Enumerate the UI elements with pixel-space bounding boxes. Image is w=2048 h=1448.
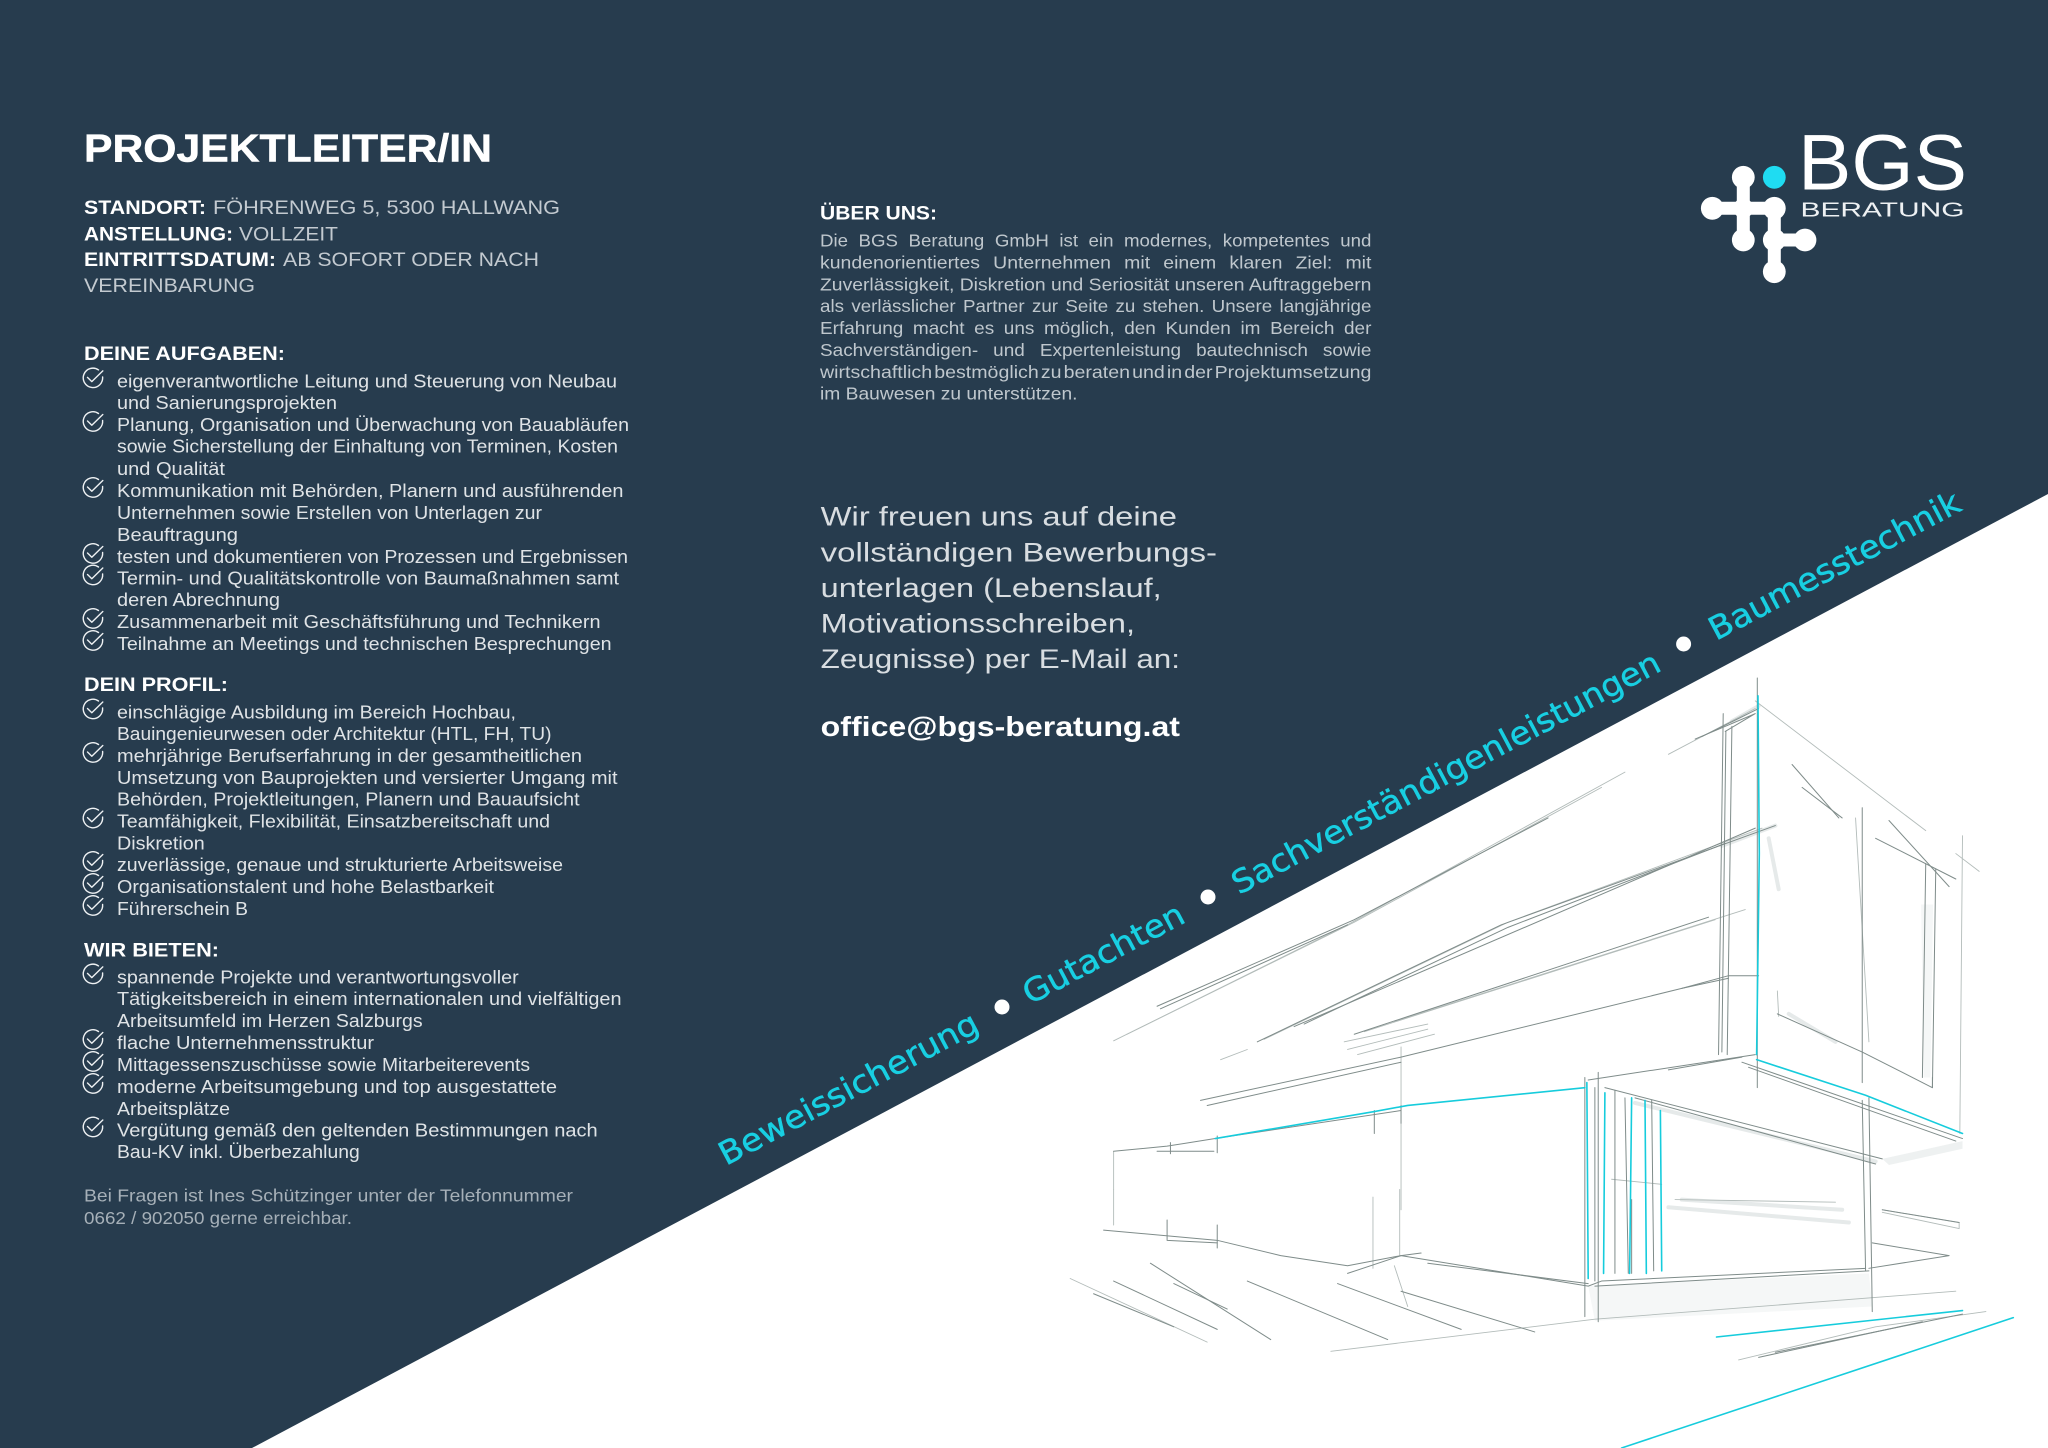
heading: wir bieten: WIR BIETEN: bbox=[84, 940, 219, 962]
list: deine aufgaben: Teilnahme an Meetings und technischen Besprechungen bbox=[117, 634, 612, 654]
job facts block: VOLLZEIT bbox=[239, 223, 338, 245]
list: wir bieten: Arbeitsplätze bbox=[117, 1099, 230, 1119]
job facts block: VEREINBARUNG bbox=[84, 275, 255, 297]
job facts block bbox=[84, 197, 560, 297]
list: deine aufgaben: testen und dokumentieren von Prozessen und Ergebnissen bbox=[117, 547, 628, 567]
bullet bbox=[994, 1000, 1010, 1014]
list: dein profil: Diskretion bbox=[117, 833, 205, 853]
list: deine aufgaben bbox=[83, 368, 629, 654]
heading: über uns: ÜBER UNS: bbox=[820, 201, 937, 224]
tagline: Gutachten: Gutachten bbox=[1016, 895, 1191, 1012]
list: wir bieten bbox=[83, 964, 621, 1162]
list: deine aufgaben: Planung, Organisation und Überwachung von Bauabläufen bbox=[117, 415, 629, 435]
white diagonal panel bbox=[252, 494, 2048, 1448]
list: wir bieten: spannende Projekte und verantwortungsvoller bbox=[117, 967, 519, 987]
diagonal tagline bbox=[712, 483, 1967, 1173]
building sketch illustration bbox=[1070, 678, 2013, 1448]
about text: Erfahrung macht es uns möglich, den Kunden im Bereich der bbox=[820, 318, 1372, 338]
call to apply bbox=[821, 502, 1217, 674]
list: dein profil bbox=[83, 699, 617, 919]
logo: BGS Beratung bbox=[1701, 117, 1967, 283]
logo wordmark BGS: BGS bbox=[1798, 117, 1967, 206]
list: dein profil: zuverlässige, genaue und strukturierte Arbeitsweise bbox=[117, 855, 563, 875]
call to apply: Zeugnisse) per E-Mail an: bbox=[821, 644, 1180, 674]
call to apply: Wir freuen uns auf deine bbox=[821, 502, 1177, 532]
list: dein profil: Führerschein B bbox=[117, 899, 248, 919]
list: dein profil: Umsetzung von Bauprojekten und versierter Umgang mit bbox=[117, 768, 618, 788]
contact note: Bei Fragen ist Ines Schützinger unter der Telefonnummer bbox=[84, 1186, 573, 1206]
list: deine aufgaben: sowie Sicherstellung der Einhaltung von Terminen, Kosten bbox=[117, 437, 618, 457]
about text: kundenorientiertes Unternehmen mit einem klaren Ziel: mit bbox=[820, 253, 1372, 273]
call to apply: Motivationsschreiben, bbox=[821, 609, 1135, 639]
list: wir bieten: Bau-KV inkl. Überbezahlung bbox=[117, 1142, 360, 1162]
list: dein profil: Bauingenieurwesen oder Architektur (HTL, FH, TU) bbox=[117, 724, 552, 744]
list: wir bieten: Mittagessenszuschüsse sowie Mitarbeiterevents bbox=[117, 1055, 530, 1075]
contact note: 0662 / 902050 gerne erreichbar. bbox=[84, 1208, 352, 1228]
about text: Die BGS Beratung GmbH ist ein modernes, kompetentes und bbox=[820, 231, 1371, 251]
job facts block: FÖHRENWEG 5, 5300 HALLWANG bbox=[213, 197, 560, 219]
panel: über uns bbox=[819, 201, 1372, 404]
email address: office@bgs-beratung.at bbox=[821, 711, 1180, 742]
bullet bbox=[1200, 890, 1216, 904]
list: dein profil: Organisationstalent und hohe Belastbarkeit bbox=[117, 877, 494, 897]
list: deine aufgaben: deren Abrechnung bbox=[117, 590, 280, 610]
tagline: Sachverständigenleistungen: Sachverständigenleistungen bbox=[1225, 643, 1667, 902]
heading: dein profil: DEIN PROFIL: bbox=[84, 674, 228, 696]
list: deine aufgaben: eigenverantwortliche Leitung und Steuerung von Neubau bbox=[117, 371, 617, 391]
about text: Sachverständigen- und Expertenleistung bautechnisch sowie bbox=[820, 340, 1371, 360]
heading: deine aufgaben: DEINE AUFGABEN: bbox=[84, 343, 285, 365]
list: deine aufgaben: Termin- und Qualitätskontrolle von Baumaßnahmen samt bbox=[117, 568, 619, 588]
job facts block: STANDORT: bbox=[84, 197, 206, 219]
list: deine aufgaben: und Qualität bbox=[117, 459, 225, 479]
tagline: Baumesstechnik: Baumesstechnik bbox=[1702, 483, 1967, 648]
call to apply: vollständigen Bewerbungs- bbox=[821, 538, 1217, 568]
about text: als verlässlicher Partner zur Seite zu stehen. Unsere langjährige bbox=[820, 296, 1371, 316]
list: wir bieten: moderne Arbeitsumgebung und top ausgestattete bbox=[117, 1077, 557, 1097]
contact note bbox=[84, 1186, 573, 1228]
about text: im Bauwesen zu unterstützen. bbox=[820, 384, 1078, 404]
list: wir bieten: Arbeitsumfeld im Herzen Salzburgs bbox=[117, 1011, 423, 1031]
list: deine aufgaben: Unternehmen sowie Erstellen von Unterlagen zur bbox=[117, 503, 542, 523]
list: deine aufgaben: und Sanierungsprojekten bbox=[117, 393, 337, 413]
list: deine aufgaben: Zusammenarbeit mit Geschäftsführung und Technikern bbox=[117, 612, 600, 632]
list: dein profil: einschlägige Ausbildung im Bereich Hochbau, bbox=[117, 702, 516, 722]
about text bbox=[819, 231, 1372, 404]
list: dein profil: Teamfähigkeit, Flexibilität, Einsatzbereitschaft und bbox=[117, 812, 550, 832]
list: dein profil: Behörden, Projektleitungen, Planern und Bauaufsicht bbox=[117, 790, 580, 810]
about text: Zuverlässigkeit, Diskretion und Seriosität unseren Auftraggebern bbox=[820, 275, 1371, 295]
tagline: Beweissicherung: Beweissicherung bbox=[712, 1004, 985, 1173]
job facts block: AB SOFORT ODER NACH bbox=[283, 249, 539, 271]
list: wir bieten: Vergütung gemäß den geltenden Bestimmungen nach bbox=[117, 1120, 598, 1140]
list: wir bieten: Tätigkeitsbereich in einem internationalen und vielfältigen bbox=[117, 989, 622, 1009]
logo mark: molecule bbox=[1701, 166, 1816, 283]
list: deine aufgaben: Beauftragung bbox=[117, 525, 238, 545]
bullet bbox=[1676, 636, 1691, 652]
call to apply: unterlagen (Lebenslauf, bbox=[821, 573, 1162, 603]
list: dein profil: mehrjährige Berufserfahrung in der gesamtheitlichen bbox=[117, 746, 582, 766]
list: deine aufgaben: Kommunikation mit Behörden, Planern und ausführenden bbox=[117, 481, 624, 501]
about text: wirtschaftlich bestmöglich zu beraten und in der Projektumsetzung bbox=[819, 362, 1371, 382]
job facts block: EINTRITTSDATUM: bbox=[84, 249, 276, 271]
panel: job details left column bbox=[83, 127, 629, 1228]
title: PROJEKTLEITER/IN bbox=[84, 127, 492, 170]
list: wir bieten: flache Unternehmensstruktur bbox=[117, 1033, 374, 1053]
job facts block: ANSTELLUNG: bbox=[84, 223, 233, 245]
logo wordmark BERATUNG: BERATUNG bbox=[1800, 199, 1964, 222]
